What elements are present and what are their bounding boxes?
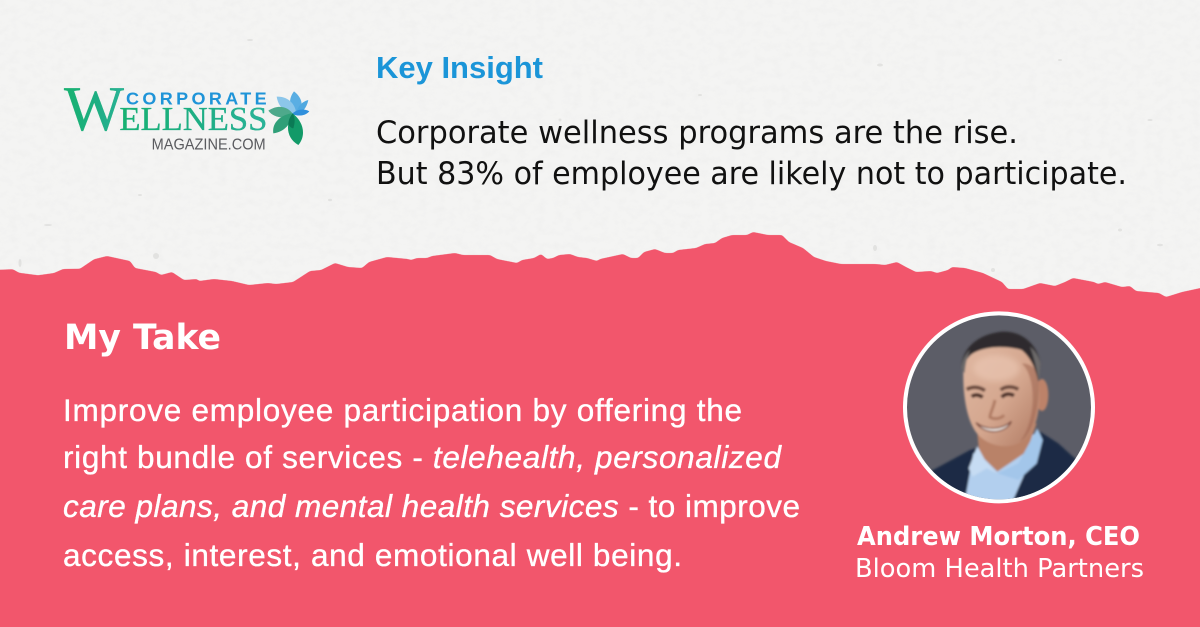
torn coral panel (0, 232, 1200, 627)
face (963, 345, 1039, 446)
insight text: But 83% of employee are likely not to participate. (376, 156, 1127, 192)
take text (63, 392, 800, 573)
jacket (931, 431, 1076, 498)
take text: right bundle of services - telehealth, personalized (63, 439, 782, 475)
nose shadow (990, 400, 1004, 419)
hair (961, 332, 1041, 382)
logo: Corporate Wellness Magazine (64, 73, 309, 153)
insight text: Corporate wellness programs are the rise. (376, 115, 1018, 151)
heading: My Take: My Take (64, 318, 221, 358)
logo wordmark MAGAZINE.COM: MAGAZINE.COM (152, 136, 266, 153)
temple grey (961, 347, 1041, 382)
neck (977, 423, 1037, 472)
portrait photo (900, 310, 1100, 510)
take text: access, interest, and emotional well being. (63, 537, 682, 573)
logo wordmark CORPORATE: CORPORATE (126, 88, 267, 108)
photo backdrop (907, 315, 1091, 500)
logo wordmark ELLNESS: ELLNESS (119, 100, 267, 138)
logo icon: lotus leaves (268, 91, 309, 145)
shirt left collar (969, 446, 997, 477)
take text: Improve employee participation by offering the (63, 392, 742, 428)
forehead highlight (973, 355, 1020, 382)
ear (1036, 379, 1048, 411)
eyes (972, 394, 1014, 397)
paper background (0, 0, 1200, 320)
take text: care plans, and mental health services - to improve (63, 488, 800, 524)
heading: Key Insight: Key Insight (376, 50, 543, 85)
photo ring (903, 311, 1095, 503)
insight text (376, 115, 1127, 192)
cheek shadow (1022, 363, 1040, 439)
brows (967, 387, 1018, 391)
name: Andrew Morton, CEO: Andrew Morton, CEO (857, 522, 1140, 552)
company: Bloom Health Partners: Bloom Health Partners (855, 554, 1144, 584)
smile (976, 421, 1011, 432)
shirt right collar (997, 428, 1043, 480)
logo wordmark W: W (64, 73, 125, 144)
undershirt (965, 433, 1037, 503)
